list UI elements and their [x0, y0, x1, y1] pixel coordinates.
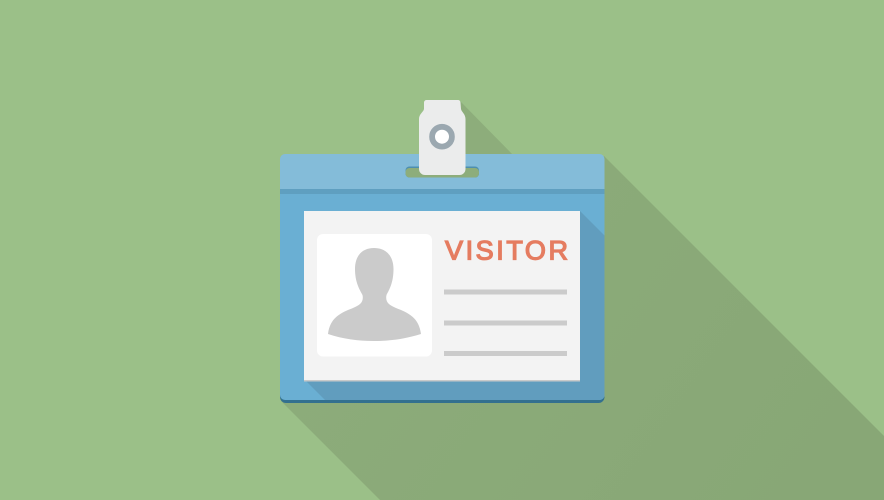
photo frame: [317, 234, 432, 356]
long shadow of clip: [460, 101, 513, 155]
card: [304, 211, 580, 382]
holder bottom edge: [280, 300, 604, 403]
top band: [280, 154, 604, 190]
long shadow of badge: [281, 156, 884, 500]
clip body: [419, 100, 466, 175]
card edge: [304, 212, 580, 382]
badge holder: [280, 154, 604, 403]
band stripe: [280, 189, 604, 194]
holder body: [280, 190, 604, 400]
heading: visitor: VISITOR: [445, 236, 568, 266]
card face: [304, 211, 580, 380]
text lines: [444, 290, 567, 356]
clip ring: [432, 127, 452, 147]
card shadow on holder: [304, 211, 604, 400]
clip: [419, 100, 466, 175]
slot: [406, 166, 479, 178]
icon: person silhouette: [328, 248, 421, 341]
